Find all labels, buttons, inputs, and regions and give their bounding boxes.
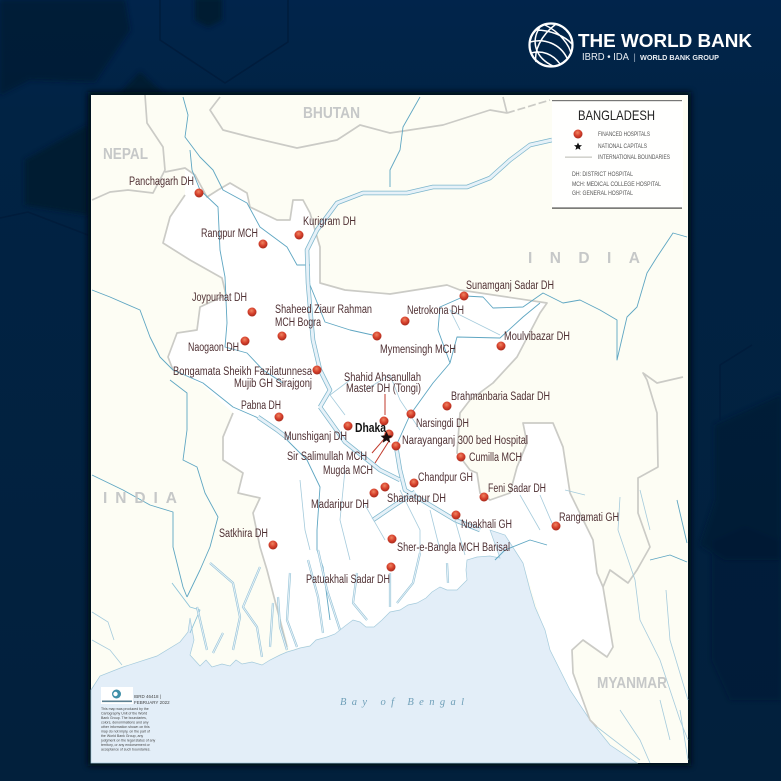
- Joypurhat DH: [192, 292, 256, 316]
- Cumilla MCH: [456, 452, 522, 464]
- Sher-e-Bangla MCH Barisal: [388, 534, 510, 554]
- legend: national capitals: NATIONAL CAPITALS: [598, 143, 647, 150]
- Bongamata Sheikh Fazilatunnesa Mujib GH Sirajgonj: Bongamata Sheikh Fazilatunnesa: [173, 366, 312, 378]
- Sher-e-Bangla MCH Barisal: Sher-e-Bangla MCH Barisal: [397, 542, 510, 554]
- map number: FEBRUARY 2022: [134, 700, 170, 705]
- map number: IBRD 46418 |: [134, 694, 161, 699]
- legend: abbreviations: DH: DISTRICT HOSPITAL: [572, 171, 633, 178]
- Bongamata Sheikh Fazilatunnesa Mujib GH Sirajgonj: Mujib GH Sirajgonj: [234, 378, 312, 390]
- Satkhira DH: Satkhira DH: [219, 528, 268, 540]
- Munshiganj DH: [284, 422, 352, 443]
- label: India north: INDIA: [528, 250, 640, 267]
- Mymensingh MCH: [372, 332, 456, 356]
- delta creeks: [197, 550, 448, 657]
- Sir Salimullah MCH: [287, 430, 394, 463]
- disclaimer text: map do not imply, on the part of: [101, 730, 150, 734]
- Naogaon DH: [188, 336, 250, 354]
- Sunamganj Sadar DH: [460, 280, 554, 300]
- country labels: [103, 105, 667, 708]
- credit logo: [101, 687, 133, 704]
- Bongamata Sheikh Fazilatunnesa Mujib GH Sirajgonj: [173, 366, 322, 390]
- Kurigram DH: Kurigram DH: [303, 216, 356, 228]
- disclaimer text: the World Bank Group, any: [101, 734, 143, 738]
- Netrokona DH: [400, 305, 464, 326]
- Shahid Ahsanullah Master DH (Tongi): Shahid Ahsanullah: [344, 372, 421, 384]
- disclaimer text: This map was produced by the: [101, 707, 149, 711]
- tagline: |: [634, 52, 636, 62]
- Feni Sadar DH: [480, 483, 546, 502]
- Mymensingh MCH: Mymensingh MCH: [380, 344, 456, 356]
- Mugda MCH: [323, 434, 389, 477]
- Chandpur GH: [410, 472, 473, 488]
- Munshiganj DH: Munshiganj DH: [284, 431, 347, 443]
- Shaheed Ziaur Rahman MCH Bogra: [275, 304, 372, 340]
- hospitals: [129, 176, 619, 586]
- wide river channels: [258, 140, 552, 530]
- Narsingdi DH: [406, 410, 469, 430]
- Pabna DH: [241, 400, 284, 422]
- Patuakhali Sadar DH: Patuakhali Sadar DH: [306, 574, 390, 586]
- capital: Dhaka: [355, 421, 392, 443]
- Pabna DH: Pabna DH: [241, 400, 281, 412]
- Brahmanbaria Sadar DH: [442, 391, 550, 410]
- Patuakhali Sadar DH: [306, 562, 396, 586]
- Netrokona DH: Netrokona DH: [407, 305, 464, 317]
- Shaheed Ziaur Rahman MCH Bogra: Shaheed Ziaur Rahman: [275, 304, 372, 316]
- Narayanganj 300 bed Hospital: Narayanganj 300 bed Hospital: [402, 435, 528, 447]
- Sir Salimullah MCH: Sir Salimullah MCH: [287, 451, 367, 463]
- Shariatpur DH: [380, 482, 446, 505]
- Panchagarh DH: [129, 176, 204, 198]
- Cumilla MCH: Cumilla MCH: [469, 452, 522, 464]
- Madaripur DH: [311, 488, 378, 511]
- icon: globe: [530, 24, 572, 66]
- Panchagarh DH: Panchagarh DH: [129, 176, 194, 188]
- Satkhira DH: [219, 528, 278, 550]
- label: Bhutan: BHUTAN: [303, 105, 360, 122]
- Joypurhat DH: Joypurhat DH: [192, 292, 247, 304]
- disclaimer text: acceptance of such boundaries.: [101, 748, 150, 752]
- Moulvibazar DH: [496, 331, 570, 350]
- legend: abbreviations: [572, 171, 661, 197]
- Narsingdi DH: Narsingdi DH: [416, 418, 469, 430]
- Feni Sadar DH: Feni Sadar DH: [488, 483, 546, 495]
- Bay of Bengal: [91, 530, 637, 763]
- legend: abbreviations: MCH: MEDICAL COLLEGE HOSPITAL: [572, 181, 661, 188]
- Rangpur MCH: Rangpur MCH: [201, 228, 258, 240]
- disclaimer text: colors, denominations and any: [101, 720, 149, 724]
- disclaimer text: territory, or any endorsement or: [101, 743, 151, 747]
- Brahmanbaria Sadar DH: Brahmanbaria Sadar DH: [451, 391, 550, 403]
- label: India west: INDIA: [103, 490, 177, 507]
- Sunamganj Sadar DH: Sunamganj Sadar DH: [466, 280, 554, 292]
- Bangladesh land: [163, 168, 613, 720]
- Shariatpur DH: Shariatpur DH: [387, 493, 446, 505]
- tagline: WORLD BANK GROUP: [640, 53, 719, 62]
- Rangamati GH: [552, 512, 619, 530]
- disclaimer text: judgment on the legal status of any: [100, 738, 156, 742]
- rivers: [92, 97, 687, 633]
- Moulvibazar DH: Moulvibazar DH: [504, 331, 570, 343]
- Madaripur DH: Madaripur DH: [311, 499, 369, 511]
- legend: financed hospitals: FINANCED HOSPITALS: [598, 131, 650, 138]
- Rangpur MCH: [201, 228, 268, 248]
- thin streams: [92, 310, 688, 763]
- Noakhali GH: Noakhali GH: [461, 519, 512, 531]
- wordmark: THE WORLD BANK: [578, 31, 752, 51]
- leader lines: [372, 394, 389, 463]
- legend: abbreviations: GH: GENERAL HOSPITAL: [572, 190, 633, 197]
- disclaimer text: Cartography Unit of the World: [101, 712, 147, 716]
- logo: The World Bank: [530, 24, 752, 66]
- label: Myanmar: MYANMAR: [597, 675, 667, 692]
- Chandpur GH: Chandpur GH: [418, 472, 473, 484]
- legend title: BANGLADESH: [578, 107, 655, 123]
- label: Nepal: NEPAL: [103, 146, 148, 163]
- Rangamati GH: Rangamati GH: [559, 512, 619, 524]
- disclaimer text: other information shown on this: [101, 725, 150, 729]
- boundaries: [92, 95, 683, 727]
- Narayanganj 300 bed Hospital: [392, 435, 528, 450]
- tagline: IBRD • IDA: [582, 52, 629, 63]
- Shaheed Ziaur Rahman MCH Bogra: MCH Bogra: [275, 317, 321, 329]
- Shahid Ahsanullah Master DH (Tongi): [344, 372, 421, 426]
- label: Bay of Bengal: Bay of Bengal: [340, 697, 464, 708]
- legend: international boundaries: INTERNATIONAL BOUNDARIES: [598, 154, 670, 161]
- map credit and disclaimer: [100, 687, 170, 752]
- Kurigram DH: [294, 216, 356, 240]
- Noakhali GH: [452, 510, 512, 531]
- capital: Dhaka: Dhaka: [355, 421, 387, 435]
- disclaimer text: Bank Group. The boundaries,: [101, 716, 147, 720]
- Naogaon DH: Naogaon DH: [188, 342, 239, 354]
- Mugda MCH: Mugda MCH: [323, 465, 373, 477]
- map panel: [88, 92, 691, 766]
- legend: [552, 100, 683, 209]
- Shahid Ahsanullah Master DH (Tongi): Master DH (Tongi): [346, 383, 421, 395]
